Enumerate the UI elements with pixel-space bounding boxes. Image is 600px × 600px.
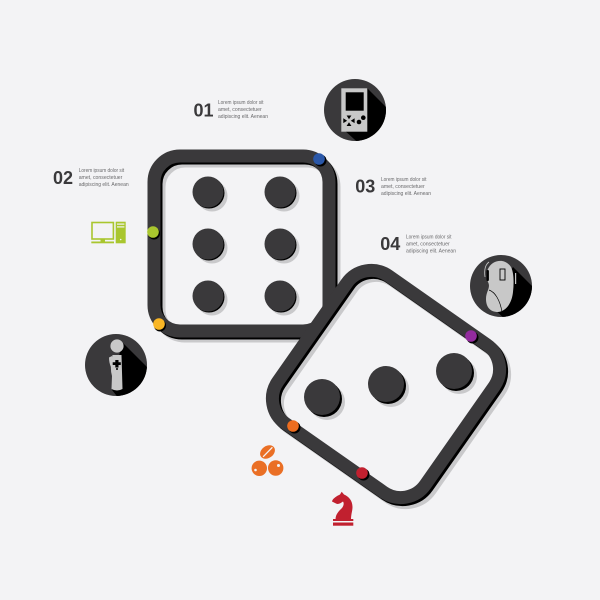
marker: green dot: [147, 226, 160, 240]
die: six pips: [154, 156, 334, 336]
marker: blue dot: [313, 153, 326, 166]
die: three pips: [261, 259, 516, 514]
text block 04: Lorem ipsum dolor sit: [406, 234, 452, 240]
text block 04: amet, consectetuer: [406, 241, 450, 247]
text block 01: 01: [194, 100, 214, 120]
text block 02: amet, consectetuer: [79, 175, 123, 181]
icon: chess knight: [332, 492, 353, 526]
text block 01: amet, consectetuer: [218, 107, 262, 113]
text block 02: 02: [53, 168, 73, 188]
icon: computer mouse in circle: [470, 255, 532, 317]
icon: cherries: [252, 442, 283, 476]
marker: yellow dot: [153, 318, 166, 332]
marker: orange dot: [287, 420, 300, 434]
text block 04: [380, 234, 456, 254]
icon: desktop computer: [91, 222, 126, 243]
text block 02: adipiscing elit. Aenean: [79, 182, 129, 188]
icon: handheld console in circle: [324, 79, 386, 141]
text block 01: adipiscing elit. Aenean: [218, 114, 268, 120]
text block 01: [194, 100, 268, 120]
icon: motion controller in circle: [85, 334, 147, 396]
text block 03: adipiscing elit. Aenean: [381, 191, 431, 197]
text block 04: adipiscing elit. Aenean: [406, 248, 456, 254]
marker: purple dot: [465, 330, 478, 344]
text block 03: 03: [355, 176, 375, 196]
marker: red dot: [356, 467, 370, 480]
text block 03: [355, 176, 431, 197]
text block 01: Lorem ipsum dolor sit: [218, 100, 264, 106]
text block 02: Lorem ipsum dolor sit: [79, 168, 125, 174]
text block 03: amet, consectetuer: [381, 184, 425, 190]
text block 02: [53, 168, 129, 188]
text block 03: Lorem ipsum dolor sit: [381, 177, 427, 183]
text block 04: 04: [380, 234, 400, 254]
